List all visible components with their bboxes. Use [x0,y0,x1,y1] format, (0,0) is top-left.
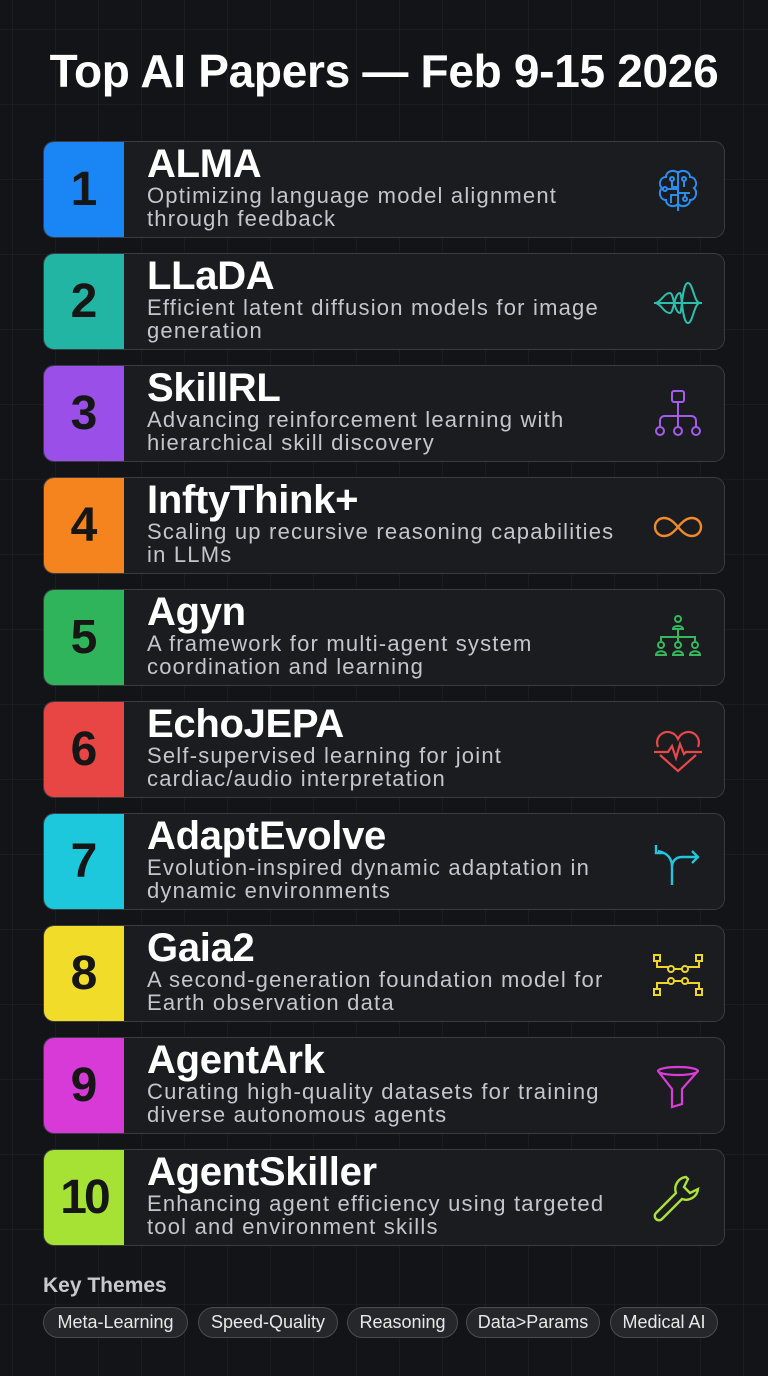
icon: agent team [655,615,701,656]
card 4: InftyThink+: 4 [71,499,97,552]
pill: Speed-Quality [198,1307,338,1338]
icon: network nodes [653,954,703,996]
card 4: InftyThink+: Scaling up recursive reasoning capabilities in LLMs [147,519,614,567]
pill: Meta-Learning [43,1307,188,1338]
card 9: AgentArk: Curating high-quality datasets for training diverse autonomous agents [147,1079,600,1127]
card 9: AgentArk: 9 [71,1059,97,1112]
pill: Data>Params: Data>Params [478,1312,588,1332]
card 6: EchoJEPA: Self-supervised learning for joint cardiac/audio interpretation [147,743,502,791]
pill: Reasoning [347,1307,458,1338]
card 1: ALMA [43,141,725,238]
card 2: LLaDA: 2 [71,275,97,328]
card 9: AgentArk [43,1037,725,1134]
card 8: Gaia2: 8 [71,947,97,1000]
pill: Medical AI [610,1307,718,1338]
card 2: LLaDA: Efficient latent diffusion models for image generation [147,295,599,343]
card 3: SkillRL: SkillRL [147,366,280,410]
card 4: InftyThink+ [43,477,725,574]
card 9: AgentArk: AgentArk [147,1038,325,1082]
title: Top AI Papers — Feb 9-15 2026 [50,45,718,97]
card 5: Agyn: A framework for multi-agent system coordination and learning [147,631,533,679]
card 4: InftyThink+: InftyThink+ [147,478,358,522]
card 10: AgentSkiller: AgentSkiller [147,1150,377,1194]
card 7: AdaptEvolve: AdaptEvolve [147,814,386,858]
pill: Reasoning: Reasoning [359,1312,446,1332]
icon: wave [654,282,702,324]
card 8: Gaia2 [43,925,725,1022]
icon: hierarchy [655,390,701,436]
card 5: Agyn: Agyn [147,590,246,634]
pill: Data>Params [466,1307,600,1338]
pill: Speed-Quality: Speed-Quality [211,1312,325,1332]
card 2: LLaDA: LLaDA [147,254,274,298]
heading: key themes: Key Themes [43,1274,167,1297]
card 2: LLaDA [43,253,725,350]
card 8: Gaia2: A second-generation foundation model for Earth observation data [147,967,604,1015]
card 7: AdaptEvolve [43,813,725,910]
icon: fork arrows [654,845,700,885]
card 6: EchoJEPA [43,701,725,798]
card 5: Agyn: 5 [71,611,97,664]
icon: brain [658,170,698,211]
card 10: AgentSkiller: Enhancing agent efficiency using targeted tool and environment skills [147,1191,604,1239]
icon: funnel [656,1066,700,1108]
card 1: ALMA: 1 [71,163,97,216]
card 6: EchoJEPA: EchoJEPA [147,702,344,746]
card 10: AgentSkiller [43,1149,725,1246]
card 8: Gaia2: Gaia2 [147,926,254,970]
card 7: AdaptEvolve: 7 [71,835,97,888]
card 3: SkillRL: Advancing reinforcement learning with hierarchical skill discovery [147,407,564,455]
icon: heart pulse [654,730,702,772]
card 5: Agyn [43,589,725,686]
card 3: SkillRL: 3 [71,387,97,440]
icon: infinity [654,516,702,538]
card 1: ALMA: Optimizing language model alignment through feedback [147,183,557,231]
card 3: SkillRL [43,365,725,462]
pill: Medical AI: Medical AI [622,1312,706,1332]
pill: Meta-Learning: Meta-Learning [57,1312,174,1332]
card 6: EchoJEPA: 6 [71,723,97,776]
icon: wrench [654,1176,700,1222]
card 10: AgentSkiller: 10 [60,1171,108,1224]
card 7: AdaptEvolve: Evolution-inspired dynamic adaptation in dynamic environments [147,855,590,903]
card 1: ALMA: ALMA [147,142,261,186]
